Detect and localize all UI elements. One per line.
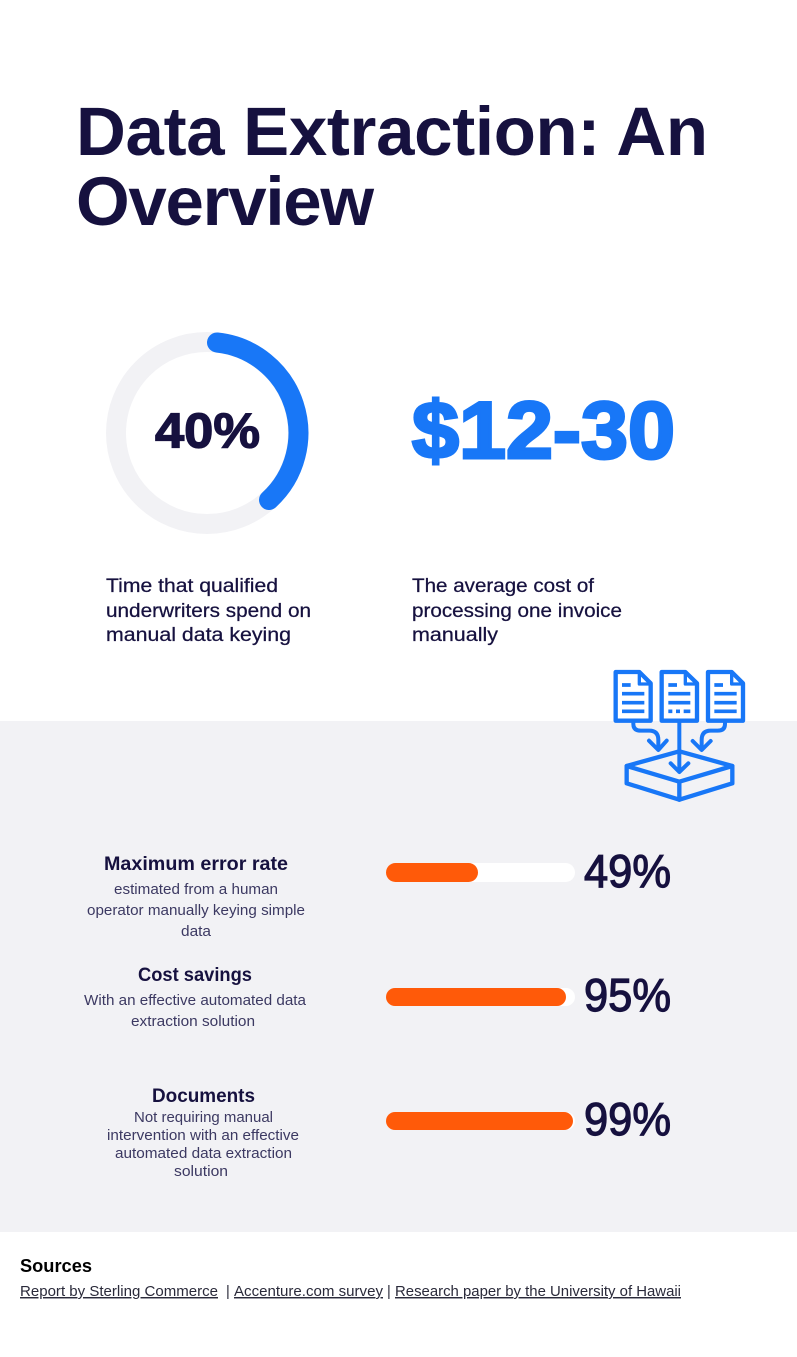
sources links: Accenture.com survey [234, 1284, 384, 1300]
icon: documents into box [616, 672, 743, 800]
text block: invoice cost: processing one invoice [412, 601, 622, 622]
donut chart: 40% [116, 342, 298, 524]
sources heading: Sources [20, 1255, 92, 1276]
value: 95%: 95% [584, 969, 671, 1021]
label: documents: Documents [152, 1086, 255, 1107]
label: documents: automated data extraction [115, 1146, 292, 1162]
label: maximum error rate: data [181, 924, 212, 940]
panel: grey metrics background [0, 721, 797, 1232]
title: Data Extraction: An [76, 93, 708, 170]
label: maximum error rate: operator manually keying simple [87, 903, 305, 919]
label: maximum error rate: estimated from a human [114, 882, 278, 898]
text block: underwriters: manual data keying [106, 625, 291, 646]
sources links: | [387, 1284, 391, 1300]
bar: 49% [386, 863, 575, 882]
title [76, 93, 708, 240]
label: documents: solution [174, 1164, 228, 1180]
text block: invoice cost: The average cost of [412, 576, 595, 597]
label: documents: intervention with an effective [107, 1128, 299, 1144]
text block: invoice cost [412, 576, 622, 646]
text block: underwriters: Time that qualified [106, 576, 278, 597]
label: documents [107, 1086, 299, 1180]
text block: underwriters: underwriters spend on [106, 601, 311, 622]
label: cost savings: Cost savings [138, 965, 252, 986]
bar: 95% [386, 988, 575, 1006]
donut chart: 40%: 40% [155, 404, 260, 458]
label: cost savings: extraction solution [131, 1014, 255, 1030]
sources links: Report by Sterling Commerce [20, 1284, 218, 1300]
value: 49%: 49% [584, 845, 671, 897]
sources links: Research paper by the University of Hawaii [395, 1284, 681, 1300]
sources links: | [226, 1284, 230, 1300]
title: Overview [76, 163, 374, 240]
bar: 99% [386, 1112, 575, 1130]
label: documents: Not requiring manual [134, 1110, 273, 1126]
label: cost savings [84, 965, 307, 1030]
label: maximum error rate: Maximum error rate [104, 854, 288, 875]
label: maximum error rate [87, 854, 305, 940]
text block: invoice cost: manually [412, 625, 499, 646]
value: 99%: 99% [584, 1093, 671, 1145]
label: cost savings: With an effective automated data [84, 993, 307, 1009]
sources links [20, 1284, 681, 1300]
big stat: invoice cost: $12-30 [412, 386, 675, 476]
text block: underwriters [106, 576, 311, 646]
